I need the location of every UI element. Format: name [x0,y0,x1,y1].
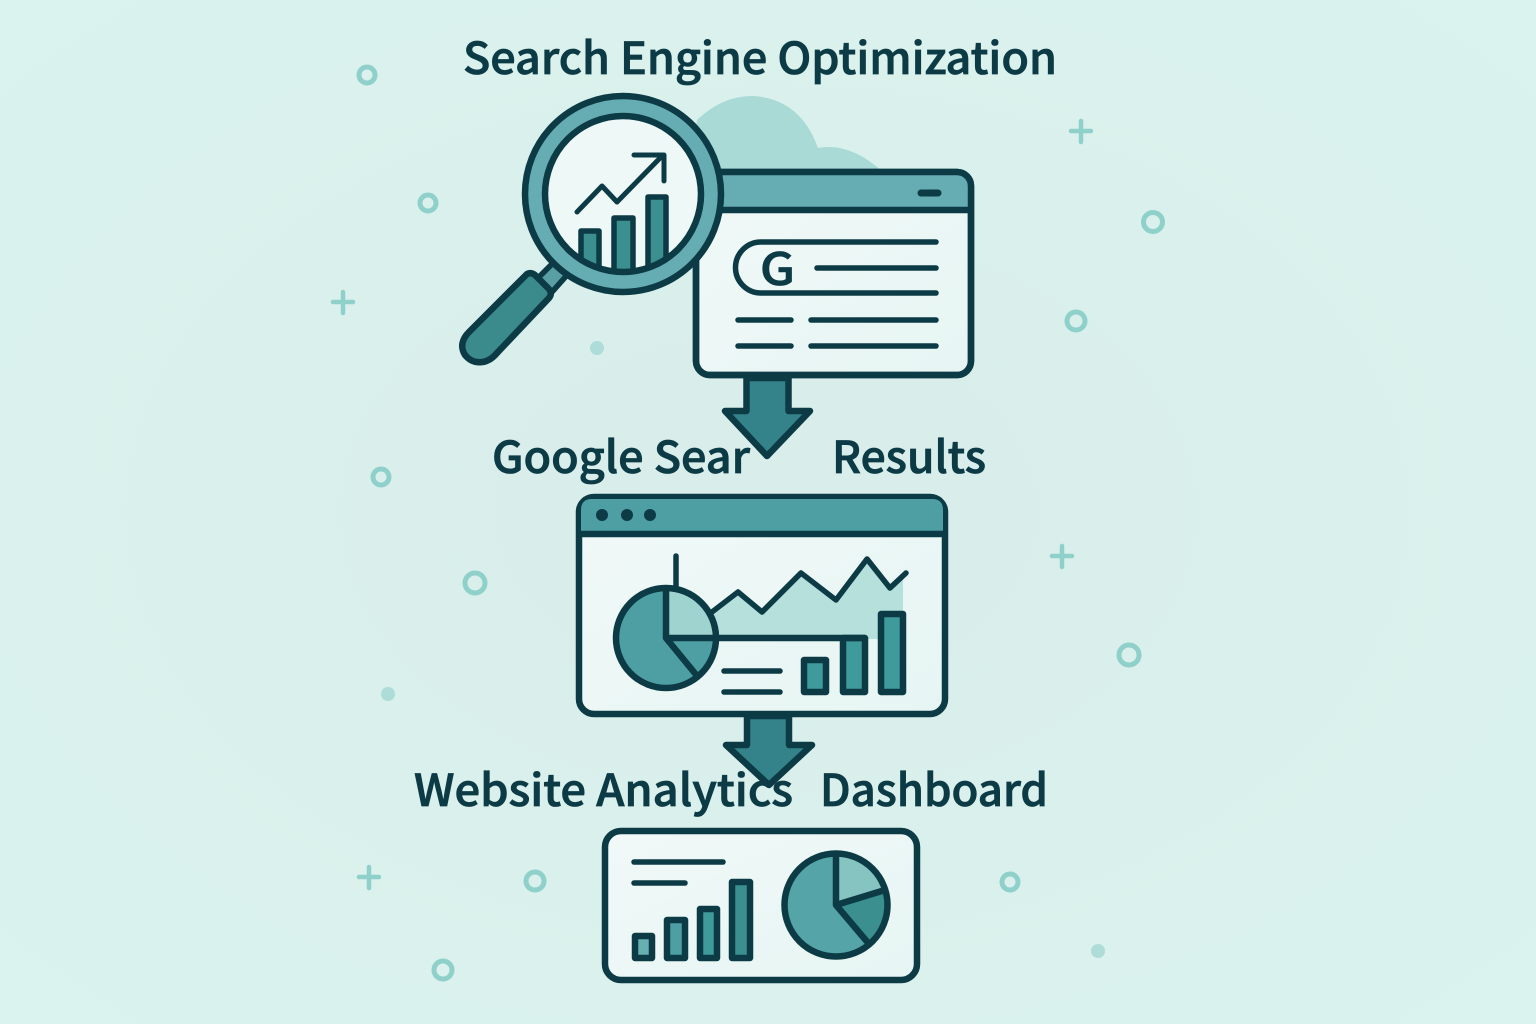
panel: dashboard summary [605,831,917,980]
heading: google search results: Results [832,422,986,486]
magnifier glass [545,116,701,272]
heading: website analytics dashboard: Website Analytics [414,755,793,819]
heading: google search results [492,422,986,486]
arrow: search to results [725,378,810,456]
summary pie chart [784,853,888,956]
title: Search Engine Optimization [463,23,1057,87]
icon: cloud [690,96,883,172]
search bar [736,233,936,298]
magnifier handle [462,262,568,362]
result lines [738,320,936,346]
panel: analytics window [579,497,945,714]
panel: search results window [696,172,971,375]
magnified chart [577,155,666,290]
search bar: G [760,233,795,298]
heading: website analytics dashboard: Dashboard [820,755,1048,819]
icon: magnifying glass [462,96,721,362]
arrow: results to dashboard [726,716,812,785]
area line chart [676,556,906,639]
legend lines [724,671,780,692]
heading: google search results: Google Sear [492,422,751,486]
bar chart [666,614,903,692]
summary lines [634,862,723,883]
window title bar [579,499,945,534]
heading: website analytics dashboard [414,755,1048,819]
summary bar chart [635,882,750,958]
magnifier ring [525,96,721,292]
decorative background markers [333,67,1162,979]
pie chart [616,588,716,688]
